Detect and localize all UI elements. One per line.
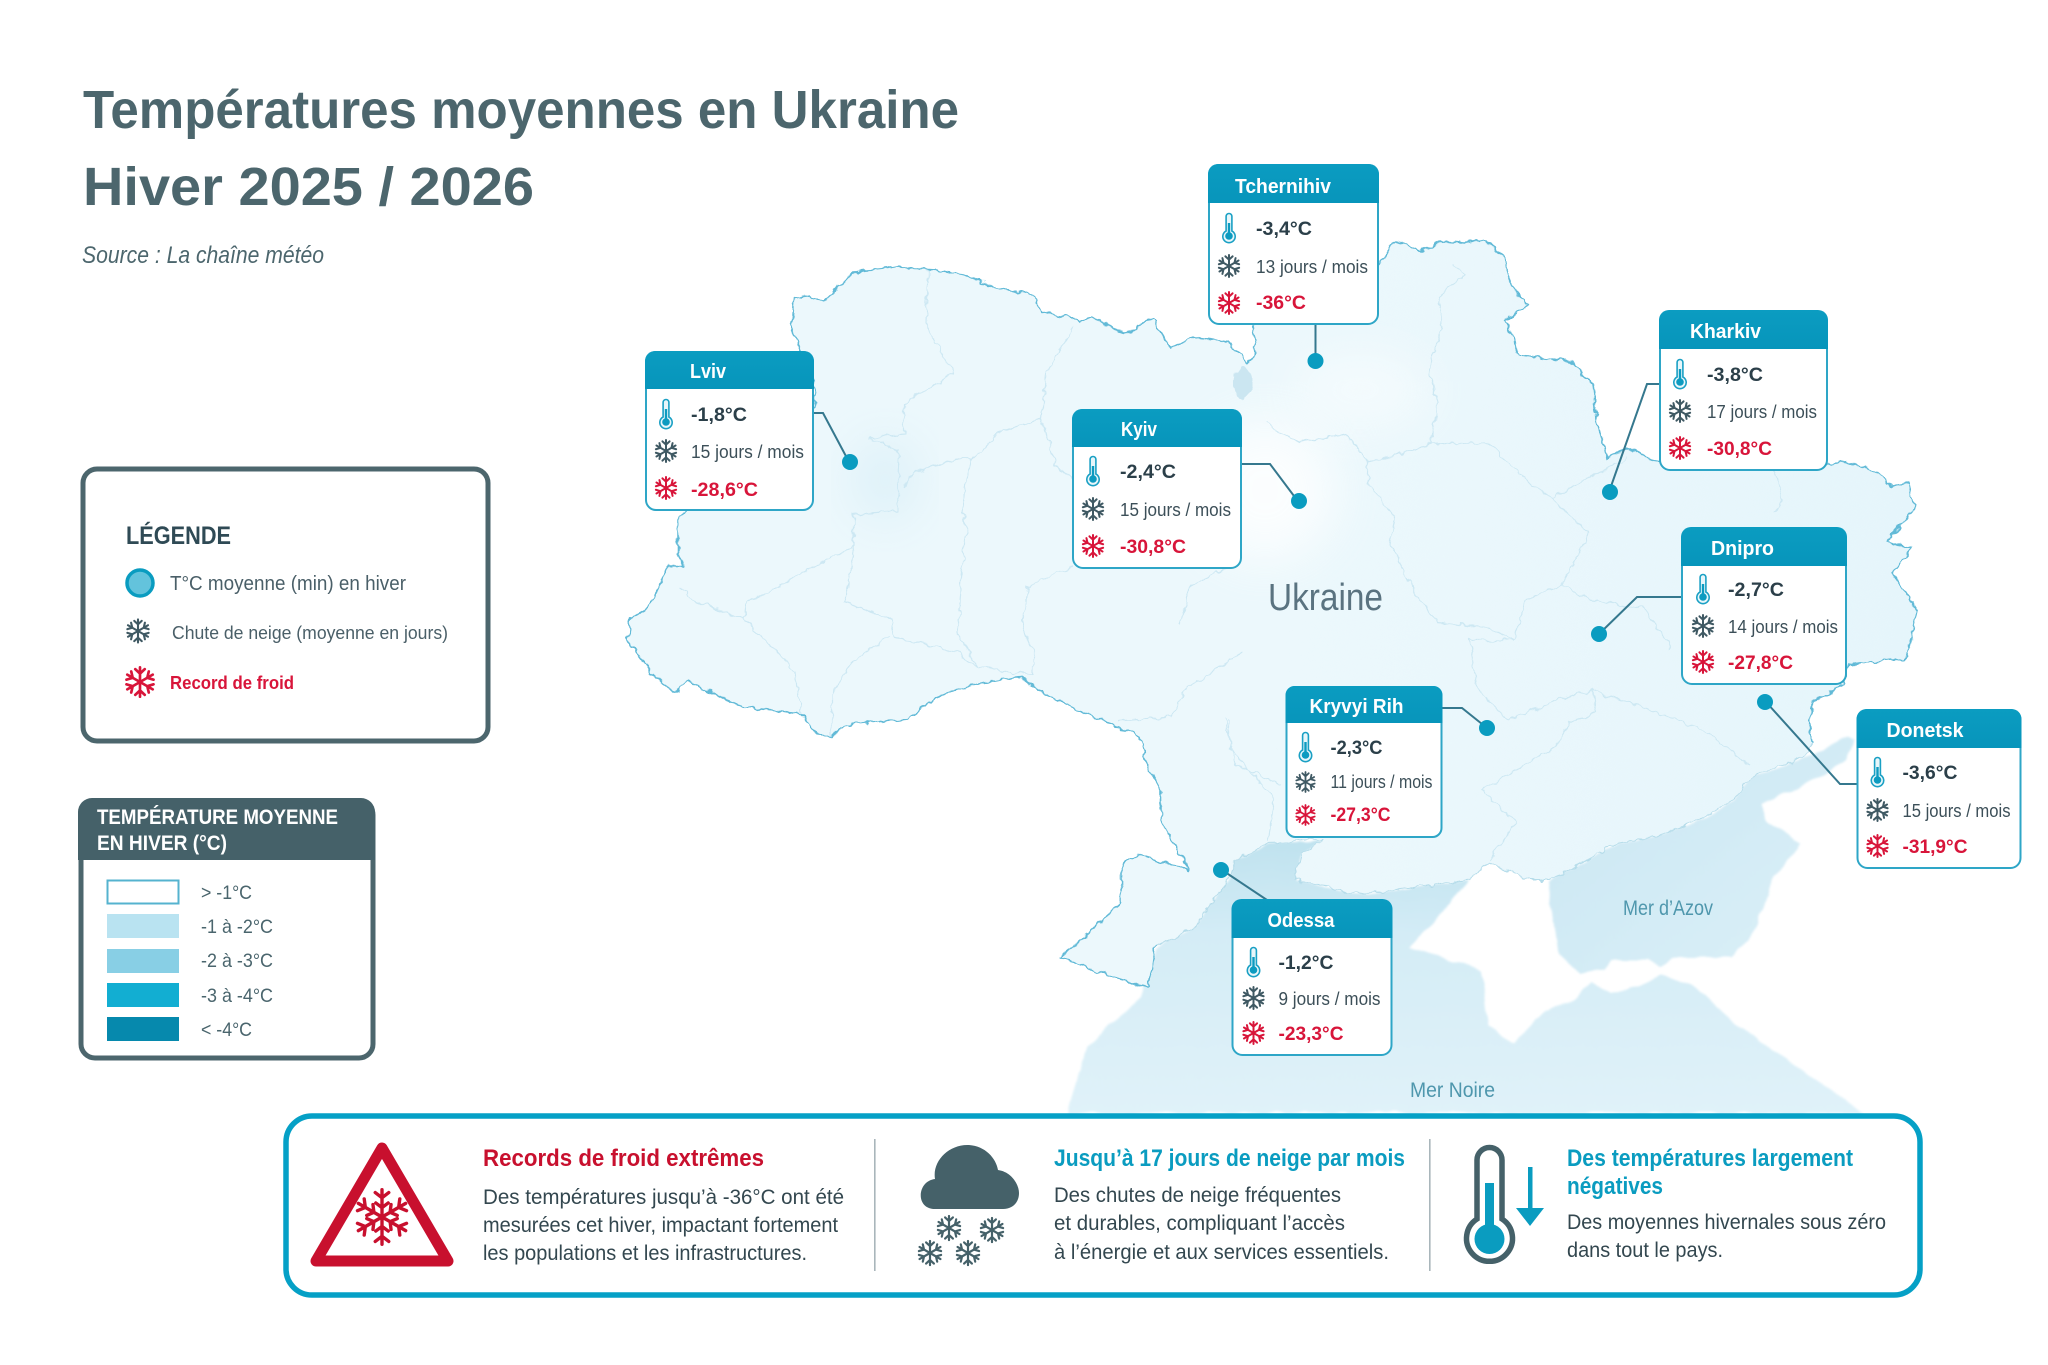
title: Hiver 2025 / 2026: [83, 157, 534, 217]
icon: snow cloud: [918, 1145, 1019, 1265]
swatch above -1: > -1°C: [201, 882, 252, 904]
card: Dnipro: -2,7°C: [1728, 579, 1784, 601]
card: Kryvyi Rih: 11 jours / mois: [1330, 771, 1432, 792]
legend: cold record: Record de froid: [170, 672, 294, 693]
block: negative temperatures: [1567, 1145, 1886, 1262]
card: Kryvyi Rih: -2,3°C: [1330, 737, 1382, 759]
card: Kryvyi Rih: -27,3°C: [1330, 804, 1390, 826]
card: Kyiv: -30,8°C: [1120, 536, 1186, 558]
card: Lviv: [645, 351, 814, 510]
card: Donetsk: Donetsk: [1886, 720, 1964, 742]
card: Lviv: Lviv: [690, 361, 727, 383]
card: Kharkiv: [1659, 310, 1828, 470]
card: Donetsk: -31,9°C: [1902, 836, 1968, 858]
scale heading: TEMPÉRATURE MOYENNE: [97, 806, 338, 829]
card: Tchernihiv: -3,4°C: [1256, 218, 1312, 240]
card: Dnipro: [1681, 527, 1847, 684]
Black Sea: [1067, 840, 1863, 1113]
scale heading: EN HIVER (°C): [97, 832, 227, 855]
block: negative temperatures: négatives: [1567, 1173, 1663, 1200]
swatch above -1: [108, 880, 252, 904]
swatch -2 to -3: [107, 949, 273, 973]
panel: key takeaways: [286, 1116, 1920, 1295]
Sea of Azov: [1549, 735, 1855, 973]
swatch -3 to -4: [107, 983, 273, 1007]
block: cold records: mesurées cet hiver, impactant fortement: [483, 1214, 838, 1237]
block: cold records: [483, 1145, 844, 1265]
title: [83, 80, 959, 217]
Kyiv reservoir: [1234, 367, 1252, 399]
title: Températures moyennes en Ukraine: [83, 80, 959, 140]
panel: legend: [83, 469, 488, 741]
card: Donetsk: [1856, 709, 2022, 868]
card: Lviv: -28,6°C: [691, 479, 758, 501]
block: snow days: Des chutes de neige fréquentes: [1054, 1184, 1341, 1207]
card: Tchernihiv: [1208, 164, 1379, 324]
label Ukraine: Ukraine: [1268, 577, 1383, 619]
block: snow days: [1054, 1145, 1405, 1264]
card: Lviv: 15 jours / mois: [691, 441, 804, 462]
card: Donetsk: -3,6°C: [1902, 762, 1958, 784]
national border: [627, 240, 1917, 988]
swatch -2 to -3: -2 à -3°C: [201, 950, 273, 972]
source: Source : La chaîne météo: [82, 242, 324, 269]
legend heading: LÉGENDE: [126, 521, 231, 550]
oblast boundaries: [680, 264, 1782, 860]
block: cold records: Records de froid extrêmes: [483, 1145, 764, 1172]
block: negative temperatures: dans tout le pays.: [1567, 1239, 1723, 1262]
map of Ukraine: [627, 240, 1917, 1113]
card: Kharkiv: Kharkiv: [1690, 321, 1762, 343]
card: Kyiv: [1072, 409, 1242, 568]
card: Donetsk: 15 jours / mois: [1902, 800, 2010, 821]
card: Odessa: Odessa: [1268, 910, 1335, 932]
card: Kyiv: -2,4°C: [1120, 461, 1176, 483]
card: Tchernihiv: 13 jours / mois: [1256, 256, 1368, 277]
card: Kyiv: Kyiv: [1121, 419, 1158, 441]
block: snow days: à l’énergie et aux services essentiels.: [1054, 1241, 1389, 1264]
label Mer d'Azov: Mer d’Azov: [1623, 897, 1713, 920]
block: snow days: et durables, compliquant l’accès: [1054, 1212, 1345, 1235]
card: Odessa: -23,3°C: [1278, 1023, 1344, 1045]
icon: thermometer with down arrow: [1466, 1148, 1544, 1261]
swatch -3 to -4: -3 à -4°C: [201, 985, 273, 1007]
swatch -1 to -2: -1 à -2°C: [201, 916, 273, 938]
card: Tchernihiv: Tchernihiv: [1235, 176, 1332, 198]
legend: snowfall: Chute de neige (moyenne en jours): [172, 623, 448, 643]
card: Kryvyi Rih: [1286, 686, 1442, 837]
block: snow days: Jusqu’à 17 jours de neige par mois: [1054, 1145, 1405, 1172]
tonal patches: [855, 350, 1430, 560]
swatch below -4: [107, 1017, 252, 1041]
panel: temperature scale: [78, 798, 375, 1058]
card: Kharkiv: 17 jours / mois: [1707, 401, 1817, 422]
legend: cold record: [125, 667, 294, 697]
land: [627, 240, 1917, 988]
icon: warning triangle: [316, 1148, 448, 1261]
card: Lviv: -1,8°C: [691, 404, 747, 426]
card: Dnipro: 14 jours / mois: [1728, 616, 1838, 637]
scale heading: [97, 806, 338, 855]
block: negative temperatures: Des moyennes hivernales sous zéro: [1567, 1211, 1886, 1234]
block: cold records: Des températures jusqu’à -36°C ont été: [483, 1186, 844, 1209]
card: Kryvyi Rih: Kryvyi Rih: [1310, 696, 1404, 718]
legend: mean temperature: [127, 570, 406, 596]
card: Odessa: -1,2°C: [1278, 952, 1334, 974]
block: cold records: les populations et les infrastructures.: [483, 1242, 807, 1265]
card: Tchernihiv: -36°C: [1256, 292, 1306, 314]
card: Kharkiv: -3,8°C: [1707, 364, 1763, 386]
card: Dnipro: -27,8°C: [1728, 652, 1793, 674]
card: Odessa: [1232, 899, 1392, 1055]
label Mer Noire: Mer Noire: [1410, 1079, 1495, 1102]
card: Odessa: 9 jours / mois: [1278, 988, 1380, 1009]
legend: mean temperature: T°C moyenne (min) en hiver: [170, 573, 406, 595]
block: negative temperatures: Des températures largement: [1567, 1145, 1853, 1172]
card: Dnipro: Dnipro: [1711, 538, 1774, 560]
connectors and location dots: [813, 325, 1857, 900]
card: Kyiv: 15 jours / mois: [1120, 499, 1231, 520]
card: Kharkiv: -30,8°C: [1707, 438, 1772, 460]
swatch below -4: < -4°C: [201, 1019, 252, 1041]
swatch -1 to -2: [107, 914, 273, 938]
